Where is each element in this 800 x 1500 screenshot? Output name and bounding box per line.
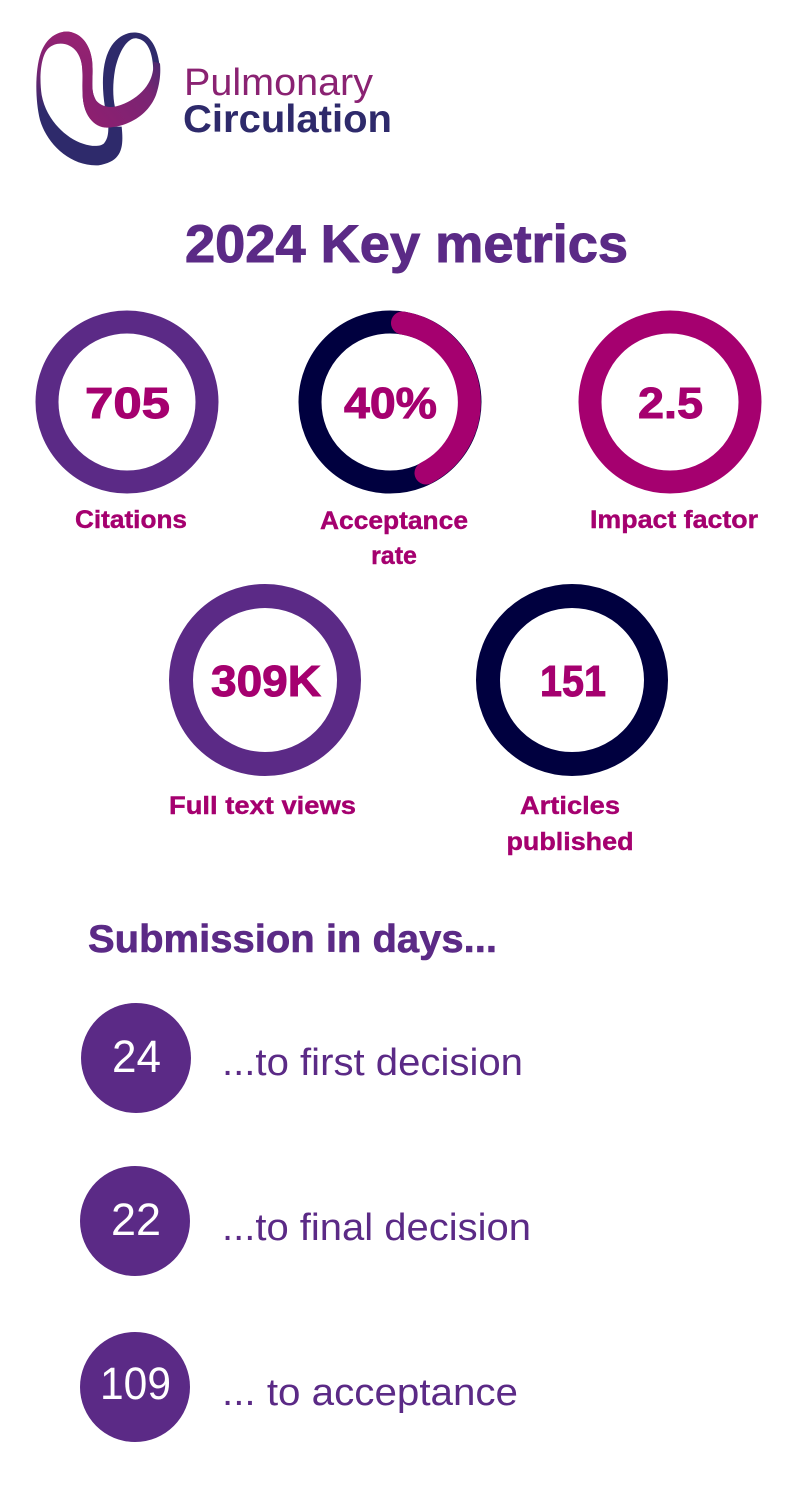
ring: acceptance rate track: [310, 322, 470, 482]
ring: citations: [47, 322, 207, 482]
metric: citations: [47, 322, 207, 534]
value: 109: 109: [100, 1358, 171, 1409]
row: days to first decision: [81, 1003, 523, 1113]
text: to first decision: ...to first decision: [222, 1042, 523, 1084]
label: acceptance rate: Acceptance: [320, 507, 468, 535]
ring: impact factor: [590, 322, 750, 482]
logo word: Pulmonary: Pulmonary: [184, 62, 373, 104]
label: articles published: Articles: [520, 792, 620, 820]
badge: 109: [80, 1332, 190, 1442]
label: full text views: Full text views: [169, 792, 356, 820]
ring: full text views: [181, 596, 349, 764]
badge: 24: [81, 1003, 191, 1113]
metric: acceptance rate: [310, 322, 470, 570]
title: 2024 Key metrics: [185, 215, 628, 274]
row: days to final decision: [80, 1166, 531, 1276]
value: 22: 22: [111, 1194, 161, 1245]
heading: submission in days: Submission in days...: [88, 918, 497, 961]
badge: 22: [80, 1166, 190, 1276]
metric: impact factor: [590, 322, 758, 534]
label: acceptance rate: rate: [371, 542, 417, 570]
value: 24: 24: [112, 1031, 161, 1082]
text: to acceptance: ... to acceptance: [222, 1372, 518, 1414]
metric: articles published: [488, 596, 656, 856]
value: 309K: 309K: [211, 657, 321, 706]
value: 705: 705: [85, 379, 170, 428]
logo: Pulmonary Circulation: [36, 32, 392, 165]
label: impact factor: Impact factor: [590, 506, 758, 534]
text: to final decision: ...to final decision: [222, 1207, 531, 1249]
icon: ribbon logo mark: [36, 32, 160, 165]
label: citations: Citations: [75, 506, 187, 534]
label: articles published: published: [506, 828, 634, 856]
row: days to acceptance: [80, 1332, 518, 1442]
ring: articles published: [488, 596, 656, 764]
logo word: Circulation: Circulation: [183, 98, 392, 141]
metric: full text views: [169, 596, 356, 820]
ring: acceptance rate 40% arc: [402, 323, 469, 473]
value: 2.5: 2.5: [638, 379, 703, 428]
value: 40%: 40%: [344, 379, 437, 428]
value: 151: 151: [540, 657, 606, 706]
